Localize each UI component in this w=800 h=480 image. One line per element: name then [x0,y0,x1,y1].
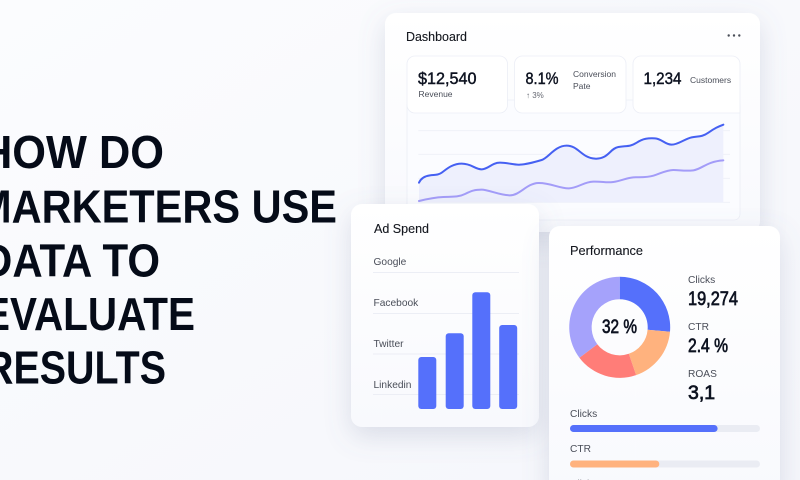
metric: clicks: 19,274 [688,288,738,310]
stat: revenue: $12,540 [418,69,476,88]
ad spend heading: Ad Spend [374,221,429,236]
progress: ctr: CTR [570,444,591,455]
metric: roas: ROAS [688,369,717,380]
panel: ad spend [351,204,539,427]
stat: conversion rate: 8.1% [526,69,558,88]
chart frame [407,100,740,220]
donut chart: 32 % [602,317,637,338]
panel: performance [549,226,780,480]
stat: conversion rate [514,56,626,113]
metric: ctr: CTR [688,322,709,333]
channel rows [373,257,519,394]
progress: ctr [570,444,760,468]
metric: ctr [688,322,728,357]
stat: customers: Customers [690,75,731,85]
metric: clicks: Clicks [688,275,715,286]
channel rows: Facebook [374,298,419,309]
donut chart [569,277,670,378]
line chart [418,125,730,202]
stat: customers [633,56,740,113]
progress: clicks [570,409,760,432]
channel rows: Twitter [374,339,404,350]
stat: conversion rate: Conversion [573,69,616,79]
stat: revenue [407,56,508,113]
icon: more menu [728,34,740,37]
stat: revenue: Revenue [418,89,453,99]
dashboard heading: Dashboard [406,29,467,44]
stat: conversion rate: Pate [573,81,591,91]
metric: ctr: 2.4 % [688,335,728,357]
bar chart [418,292,517,409]
metric: roas [688,369,717,404]
progress: clicks: Clicks [570,409,597,420]
stat: conversion rate: ↑ 3% [526,91,544,100]
metric: roas: 3,1 [688,382,715,404]
performance heading: Performance [570,243,643,258]
title [0,126,337,394]
stat: customers: 1,234 [644,69,682,88]
panel: dashboard [385,13,760,232]
channel rows: Google [374,257,407,268]
channel rows: Linkedin [374,380,411,391]
metric: clicks [688,275,738,310]
